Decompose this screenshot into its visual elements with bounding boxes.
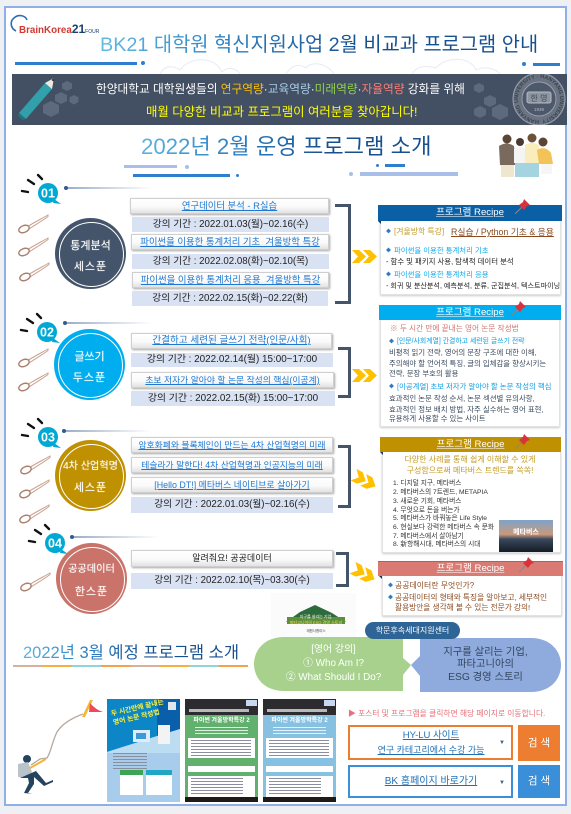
header: 프로그램 Recipe xyxy=(437,439,504,450)
text: English lecture: [영어 강의] xyxy=(311,644,356,655)
seal: Hanyang University: HANYANG UNIVERSITY · HANYANG UNIVERSITY xyxy=(514,74,564,124)
arrow 01 xyxy=(352,250,377,263)
rule 03 xyxy=(62,429,148,433)
bracket 03 xyxy=(338,445,351,508)
circle: writing: 두스푼 xyxy=(73,372,106,384)
header: 프로그램 Recipe xyxy=(436,307,504,318)
clouds xyxy=(160,58,500,74)
seal: Hanyang University: 1939 xyxy=(534,107,545,112)
course list 01: 강의 기간 : 2022.01.03(월)~02.16(수) xyxy=(153,219,308,230)
recipe panel 04: 활용방안을 생각해 볼 수 있는 전문가 강의! xyxy=(395,603,530,612)
badge 01: 01 xyxy=(41,186,55,200)
recipe panel 01: 파이썬을 이용한 통계처리 응용 xyxy=(394,270,489,279)
banner xyxy=(12,74,567,125)
course list 01 xyxy=(130,198,332,306)
poster: Python winter 1 xyxy=(185,699,258,802)
badge 03: 03 xyxy=(41,430,55,444)
recipe panel 04: 공공데이터의 형태와 특징을 알아보고, 세부적인 xyxy=(395,593,547,602)
pill: center name: 학문후속세대지원센터 xyxy=(376,626,449,635)
icon: pin xyxy=(515,199,530,214)
link box: HY-LU: ▼ xyxy=(499,740,505,746)
circle: public data xyxy=(56,543,127,614)
text: ESG lecture: ESG 경영 스토리 xyxy=(448,672,523,683)
recipe panel 01: - 회귀 및 분산분석, 예측분석, 분류, 군집분석, 텍스트마이닝 xyxy=(386,282,560,290)
logo: BrainKorea21 xyxy=(10,14,100,36)
recipe panel 02: 효과적인 정보 배치 방법, 자주 실수하는 영어 표현, xyxy=(389,405,543,414)
recipe panel 02: 효과적인 논문 작성 순서, 논문 섹션별 유의사항, xyxy=(389,394,535,403)
course list 02: 초보 저자가 알아야 할 논문 작성의 핵심(이공계) xyxy=(145,375,320,385)
arrow 04 xyxy=(350,562,374,582)
recipe panel 03: 7. 메타버스에서 살아남기 xyxy=(393,533,464,540)
button: search orange xyxy=(518,725,560,761)
arrow 03 xyxy=(350,469,376,489)
title divider right xyxy=(522,62,560,66)
course list 02 xyxy=(130,332,336,406)
recipe panel 01: - 함수 및 패키지 사용, 탐색적 데이터 분석 xyxy=(386,257,514,266)
book: ESG: 파타고니아의 ESG 경영 스토리 xyxy=(290,620,342,625)
thumbnail: metaverse: 메타버스 xyxy=(513,529,539,536)
recipe panel 04: ◆ xyxy=(388,583,393,589)
seal: Hanyang University: 한 영 xyxy=(531,93,547,103)
recipe panel 03: 5. 메타버스가 바꿔놓은 Life Style xyxy=(393,515,487,522)
recipe panel 04 xyxy=(378,557,563,618)
illustration: person flying kite xyxy=(0,700,105,800)
header xyxy=(378,561,563,576)
link box: BK homepage xyxy=(348,765,513,798)
March underline xyxy=(13,665,248,667)
button: search orange: 검 색 xyxy=(528,737,550,749)
circle: public data: 공공데이터 xyxy=(68,564,115,575)
recipe panel 01: ◆ xyxy=(386,229,391,235)
recipe panel 02: 유용하게 사용할 수 있는 사이트 xyxy=(389,414,486,423)
recipe panel 03: 1. 디지털 지구, 메타버스 xyxy=(393,480,461,487)
spoon 04 xyxy=(20,572,50,592)
bracket 02 xyxy=(338,347,351,398)
course list 02: 강의 기간 : 2022.02.14(월) 15:00~17:00 xyxy=(147,354,317,365)
recipe panel 01: ◆ xyxy=(386,272,391,278)
icon: pencil xyxy=(18,78,54,120)
circle: statistics: 통계분석 xyxy=(70,240,111,252)
badge 01 xyxy=(20,174,61,204)
circle: 4th industrial revolution: 4차 산업혁명 xyxy=(63,461,118,472)
recipe panel 01: 파이썬을 이용한 통계처리 기초 xyxy=(394,246,489,255)
logo: BrainKorea21: BrainKorea21FOUR xyxy=(19,22,99,36)
link box: HY-LU: HY-LU 사이트 xyxy=(403,730,459,741)
banner line 2: 매월 다양한 비교과 프로그램이 여러분을 찾아갑니다! xyxy=(146,105,417,119)
notice: ▶ 포스터 및 프로그램을 클릭하면 해당 페이지로 이동합니다. xyxy=(348,709,545,718)
course list 03: 암호화폐와 블록체인이 만드는 4차 산업혁명의 미래 xyxy=(138,440,326,450)
shape: ESG lecture xyxy=(411,638,562,693)
recipe panel 03: 구성함으로써 메타버스 트렌드를 쏙쏙! xyxy=(407,466,533,475)
poster: English paper writing xyxy=(107,699,180,802)
course list 03: [Hello DT!] 메타버스 네이티브로 살아가기 xyxy=(154,480,310,490)
shape: English lecture xyxy=(254,637,411,691)
text: English lecture: ① Who Am I? xyxy=(303,658,364,669)
link box: HY-LU xyxy=(348,725,513,760)
header: 프로그램 Recipe xyxy=(436,207,504,218)
link box: BK homepage: BK 홈페이지 바로가기 xyxy=(385,776,477,787)
course list 04 xyxy=(130,550,336,589)
button: search blue: 검 색 xyxy=(528,775,550,787)
recipe panel 02: 비평적 읽기 전략, 영어의 문장 구조에 대한 이해, xyxy=(389,348,537,357)
recipe panel 02: [인문/사회계열] 간결하고 세련된 글쓰기 전략 xyxy=(397,338,525,345)
pill: center name xyxy=(365,622,460,639)
poster: English paper writing: 영어 논문 작성법 xyxy=(113,709,160,727)
badge 02 xyxy=(20,312,60,343)
recipe panel 02 xyxy=(379,301,561,429)
title divider left xyxy=(15,61,145,65)
heading divider left xyxy=(124,165,239,177)
course list 04: 강의 기간 : 2022.02.10(목)~03.30(수) xyxy=(154,575,310,586)
rule 04 xyxy=(70,535,156,539)
badge 04 xyxy=(28,524,67,554)
book: ESG xyxy=(271,593,356,637)
book: ESG: 지구를 살리는 기업, xyxy=(300,614,332,619)
course list 03: 강의 기간 : 2022.01.03(월)~02.16(수) xyxy=(154,499,310,510)
hexagon decoration xyxy=(43,81,508,120)
header xyxy=(378,205,562,221)
button: search blue xyxy=(518,765,560,798)
poster: English paper writing: 두 시간만에 끝내는 xyxy=(111,699,165,718)
course list 02: 강의 기간 : 2022.02.15(화) 15:00~17:00 xyxy=(148,393,318,404)
main title: BK21 대학원 혁신지원사업 2월 비교과 프로그램 안내 xyxy=(100,34,538,56)
March heading: 2022년 3월 예정 프로그램 소개 xyxy=(23,644,239,662)
circle: statistics: 세스푼 xyxy=(74,261,107,273)
banner line 1: 한양대학교 대학원생들의 연구역량·교육역량·미래역량·자율역량 강화를 위해 xyxy=(96,83,465,96)
recipe panel 02: ◆ xyxy=(389,384,394,390)
text: ESG lecture: 지구를 살리는 기업, xyxy=(443,647,528,658)
bracket 01 xyxy=(335,204,351,304)
bracket 04 xyxy=(336,552,349,587)
circle: 4th industrial revolution xyxy=(55,440,126,511)
course list 04: 알려줘요! 공공데이터 xyxy=(192,553,272,563)
text: English lecture: ② What Should I Do? xyxy=(286,672,381,683)
circle: writing xyxy=(54,329,125,400)
recipe panel 03 xyxy=(380,434,562,555)
course list 02: 간결하고 세련된 글쓰기 전략(인문/사회) xyxy=(152,335,311,346)
course list 01: 연구데이터 분석 - R실습 xyxy=(182,200,277,211)
spoons 02 xyxy=(18,348,48,392)
badge 03 xyxy=(20,418,61,448)
badge 04: 04 xyxy=(48,536,62,550)
recipe panel 01 xyxy=(378,199,562,297)
course list 03: 테슬라가 말한다! 4차 산업혁명과 인공지능의 미래 xyxy=(141,460,323,470)
circle: public data: 한스푼 xyxy=(75,586,108,598)
icon: pin xyxy=(515,434,530,449)
recipe panel 03: 3. 새로운 기회, 메타버스 xyxy=(393,498,461,505)
poster: Python winter 2 xyxy=(263,699,336,802)
recipe panel 03: 2. 메타버스의 7트렌드, METAPIA xyxy=(393,489,488,496)
heading divider right xyxy=(349,164,458,176)
recipe panel 02: 주의해야 할 언어적 특징, 글의 입체감을 향상시키는 xyxy=(389,359,546,368)
section heading: February programs: 2022년 2월 운영 프로그램 소개 xyxy=(141,134,431,159)
link box: BK homepage: ▼ xyxy=(499,780,505,786)
book: ESG: 재원사항미스 xyxy=(306,629,326,633)
recipe panel 01: [겨울방학 특강] xyxy=(394,227,444,236)
text: ESG lecture: 파타고니아의 xyxy=(457,659,514,670)
recipe panel 03: 8. 新항해시대, 메타버스의 시대 xyxy=(393,541,480,548)
course list 01: 강의 기간 : 2022.02.08(화)~02.10(목) xyxy=(153,256,308,267)
circle: 4th industrial revolution: 세스푼 xyxy=(74,482,107,494)
spoons 03 xyxy=(19,455,50,524)
recipe panel 03: 다양한 사례를 통해 쉽게 이해할 수 있게 xyxy=(404,455,536,464)
recipe panel 04: 공공데이터란 무엇인가? xyxy=(395,581,474,590)
recipe panel 01: ◆ xyxy=(386,248,391,254)
recipe panel 02: 전략, 문장 부호의 활용 xyxy=(389,369,458,378)
recipe panel 03: 6. 현실보다 강력한 메타버스 속 문화 xyxy=(393,524,494,531)
link box: HY-LU: 연구 카테고리에서 수강 가능 xyxy=(378,745,484,755)
header xyxy=(379,305,561,320)
recipe panel 01: R실습 / Python 기초 & 응용 xyxy=(451,227,554,237)
spoons 01 xyxy=(18,214,50,282)
poster: Python winter 2: 파이썬 겨울방학특강 2 xyxy=(271,718,328,724)
icon: pin xyxy=(511,301,526,316)
text: English lecture xyxy=(259,644,408,685)
circle: writing: 글쓰기 xyxy=(74,351,105,363)
header xyxy=(380,437,561,452)
course list 01: 파이썬을 이용한 통계처리 응용_겨울방학 특강 xyxy=(141,274,320,285)
recipe panel 02: ※ 두 시간 만에 끝내는 영어 논문 작성법 xyxy=(390,324,519,333)
rule 01 xyxy=(64,186,150,190)
illustration: students xyxy=(499,134,553,177)
text: ESG lecture xyxy=(419,647,552,684)
rule 02 xyxy=(63,321,148,325)
recipe panel 02: ◆ xyxy=(389,339,394,345)
badge 02: 02 xyxy=(40,326,54,340)
poster: Python winter 1: 파이썬 겨울방학특강 2 xyxy=(193,718,250,724)
recipe panel 03: 4. 무엇으로 돈을 버는가 xyxy=(393,507,460,514)
icon: pin xyxy=(519,557,534,572)
thumbnail: metaverse xyxy=(499,520,553,552)
circle: statistics xyxy=(55,218,126,289)
course list 03 xyxy=(130,436,336,513)
recipe panel 02: [이공계열] 초보 저자가 알아야 할 논문 작성의 핵심 xyxy=(397,382,551,391)
course list 01: 강의 기간 : 2022.02.15(화)~02.22(화) xyxy=(152,293,308,304)
recipe panel 04: ◆ xyxy=(388,595,393,601)
course list 01: 파이썬을 이용한 통계처리 기초_겨울방학 특강 xyxy=(140,236,320,247)
arrow 02 xyxy=(352,369,377,382)
header: 프로그램 Recipe xyxy=(437,563,504,574)
